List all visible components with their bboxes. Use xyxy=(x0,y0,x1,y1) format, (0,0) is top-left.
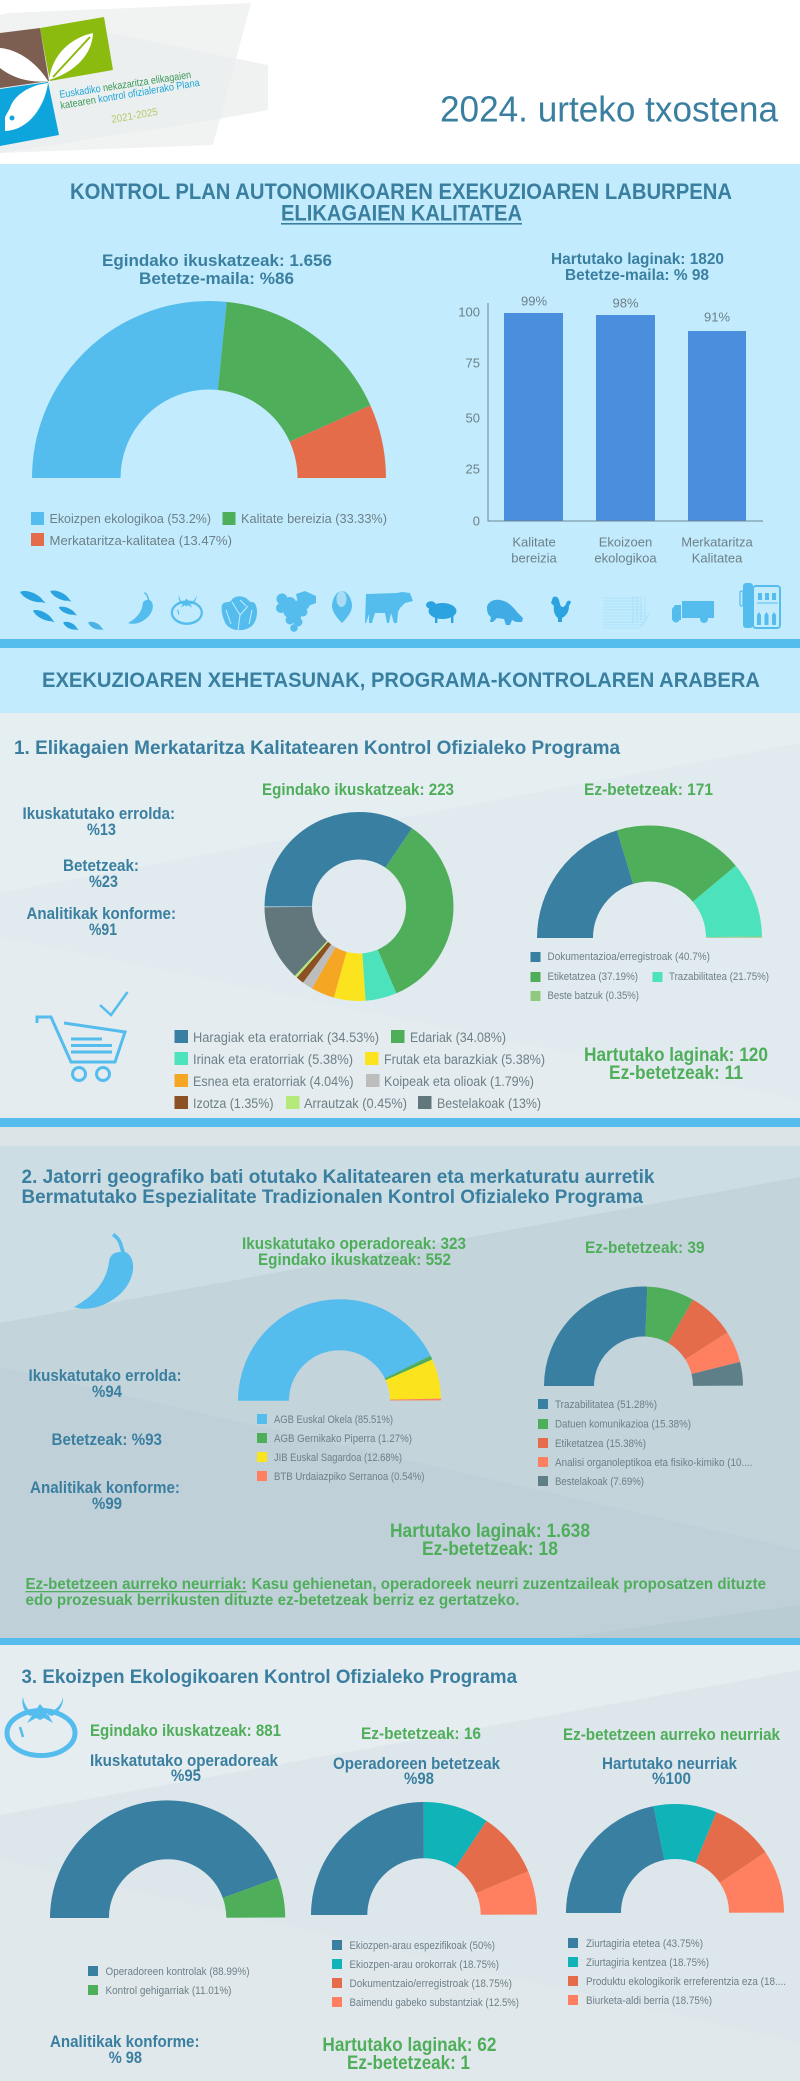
heading: programme 2: Bermatutako Espezialitate Tradizionalen Kontrol Ofizialeko Programa xyxy=(22,1187,643,1208)
legend: quality types: Kalitate bereizia (33.33%) xyxy=(241,511,387,526)
bar chart: samples compliance: 50 xyxy=(466,410,480,426)
legend: non-compliances: Trazabilitatea (21.75%) xyxy=(669,971,769,983)
heading: programme 2: 2. Jatorri geografiko bati otutako Kalitatearen eta merkaturatu aurretik xyxy=(22,1167,655,1188)
title: 2024. urteko txostena xyxy=(440,88,779,130)
legend: inspections by label: AGB Gernikako Piperra (1.27%) xyxy=(274,1433,412,1445)
logo: Euskadiko nekazaritza elikagaien xyxy=(59,69,192,101)
stats: column headings: %98 xyxy=(404,1770,434,1788)
panel: programme 2 xyxy=(0,1146,800,1645)
stat: non-compliances: Ez-betetzeak: 39 xyxy=(585,1239,704,1257)
samples stat xyxy=(551,251,724,284)
stat: conforming analyses: % 98 xyxy=(109,2049,142,2067)
icon: rooster xyxy=(551,597,571,622)
legend: non-compliances xyxy=(538,1399,752,1488)
legend: inspections by product: Esnea eta eratorriak (4.04%) xyxy=(193,1074,354,1089)
heading: programme 2 xyxy=(22,1167,655,1208)
heading: programme 1: 1. Elikagaien Merkataritza Kalitatearen Kontrol Ofizialeko Programa xyxy=(14,738,620,759)
bar chart: samples compliance: 0 xyxy=(473,514,480,528)
stat: samples: Hartutako laginak: 62 xyxy=(322,2035,496,2056)
legend: inspections by label: JIB Euskal Sagardoa (12.68%) xyxy=(274,1452,402,1464)
legend: inspections by product: Arrautzak (0.45%) xyxy=(304,1096,407,1111)
legend: inspections by product: Frutak eta barazkiak (5.38%) xyxy=(384,1052,545,1067)
stat: conforming analyses xyxy=(50,2033,200,2067)
stat: conforming analyses: Analitikak konforme: xyxy=(50,2033,200,2051)
bar chart: samples compliance: Kalitatea xyxy=(692,550,743,566)
icon: fish xyxy=(19,588,105,632)
stat: inspections: Egindako ikuskatzeak: 223 xyxy=(262,781,454,799)
samples stat: Hartutako laginak: 1820 xyxy=(551,251,724,268)
half donut chart: controls xyxy=(79,1830,256,1918)
bar chart: samples compliance: Kalitate xyxy=(512,534,556,550)
bar chart: samples compliance: bereizia xyxy=(511,550,558,566)
icon: cow xyxy=(365,592,413,623)
icon: documents xyxy=(603,596,650,628)
legend: quality types: Ekoizpen ekologikoa (53.2%) xyxy=(50,511,211,526)
stats: column headings: Ikuskatutako operadoreak xyxy=(90,1752,279,1770)
bar chart: samples compliance: ekologikoa xyxy=(594,550,657,566)
text block: measures: Kasu gehienetan, operadoreek neurri zuzentzaileak proposatzen dituzte xyxy=(252,1576,766,1593)
bar chart: samples compliance: 75 xyxy=(466,356,480,370)
half donut chart: non-compliances xyxy=(569,1312,718,1386)
legend: non-compliances: Trazabilitatea (51.28%) xyxy=(555,1399,657,1411)
stats: column headings: Ez-betetzeak: 16 xyxy=(361,1725,481,1743)
heading: summary: KONTROL PLAN AUTONOMIKOAREN EXEKUZIOAREN LABURPENA xyxy=(70,179,732,204)
stats: column headings: Ez-betetzeen aurreko neurriak xyxy=(563,1726,781,1744)
stats: census and compliance: Betetzeak: %93 xyxy=(52,1431,162,1449)
stat: samples: Ez-betetzeak: 18 xyxy=(422,1539,558,1560)
stat: samples: Ez-betetzeak: 11 xyxy=(609,1063,743,1084)
heading: execution details: EXEKUZIOAREN XEHETASUNAK, PROGRAMA-KONTROLAREN ARABERA xyxy=(42,669,760,692)
legend: inspections by product xyxy=(174,1030,545,1111)
legend: quality types xyxy=(31,511,387,548)
inspections stat xyxy=(102,251,332,288)
legend: non-compliances: Dokumentzaio/erregistroak (18.75%) xyxy=(350,1978,512,1990)
stats: column headings: Egindako ikuskatzeak: 881 xyxy=(90,1722,281,1740)
stats: census and compliance xyxy=(28,1367,182,1513)
bar chart: samples compliance: 99% xyxy=(521,294,547,308)
legend: inspections by product: Bestelakoak (13%) xyxy=(437,1096,541,1111)
text block: measures: Ez-betetzeen aurreko neurriak: xyxy=(26,1576,246,1593)
legend: non-compliances: Baimendu gabeko substantziak (12.5%) xyxy=(350,1997,519,2009)
stat: samples xyxy=(390,1521,590,1560)
stat: operators and inspections: Egindako ikuskatzeak: 552 xyxy=(258,1251,451,1269)
stats: census and compliance: %94 xyxy=(92,1383,123,1401)
legend: measures: Biurketa-aldi berria (18.75%) xyxy=(586,1995,712,2007)
stats: census and compliance xyxy=(22,805,176,939)
icon: sheep xyxy=(426,601,456,623)
icon: tomato xyxy=(7,1697,75,1756)
stats: column headings: Hartutako neurriak xyxy=(602,1755,738,1773)
stat: non-compliances: Ez-betetzeak: 171 xyxy=(584,781,713,799)
panel: summary xyxy=(0,164,800,713)
legend: non-compliances: Etiketatzea (37.19%) xyxy=(548,971,638,983)
icon: grapes xyxy=(276,591,316,632)
legend: inspections by product: Edariak (34.08%) xyxy=(410,1030,506,1045)
half donut chart: measures xyxy=(594,1832,756,1913)
inspections stat: Betetze-maila: %86 xyxy=(139,269,294,288)
legend: inspections by product: Irinak eta eratorriak (5.38%) xyxy=(193,1052,353,1067)
panel: header xyxy=(0,0,800,164)
stats: census and compliance: %13 xyxy=(87,821,116,839)
legend: inspections by label xyxy=(257,1414,424,1483)
logo: 2021-2025 xyxy=(110,106,159,126)
icon: chilli pepper xyxy=(74,1233,133,1309)
stats: census and compliance: Analitikak konforme: xyxy=(30,1479,180,1497)
stat: operators and inspections: Ikuskatutako operadoreak: 323 xyxy=(242,1235,466,1253)
legend: measures xyxy=(568,1938,786,2007)
stats: column headings: %95 xyxy=(171,1767,201,1785)
legend: measures: Ziurtagiria etetea (43.75%) xyxy=(586,1938,703,1950)
logo: katearen kontrol ofizialerako Plana xyxy=(60,77,201,112)
legend: inspections by label: AGB Euskal Okela (85.51%) xyxy=(274,1414,393,1426)
stats: census and compliance: Ikuskatutako errolda: xyxy=(22,805,175,823)
legend: inspections by product: Koipeak eta olioak (1.79%) xyxy=(384,1074,534,1089)
legend: non-compliances: Ekiozpen-arau orokorrak (18.75%) xyxy=(350,1959,499,1971)
bar chart: samples compliance: 91% xyxy=(704,310,730,324)
heading: summary: ELIKAGAIEN KALITATEA xyxy=(281,200,522,226)
half donut chart: non-compliances xyxy=(339,1830,509,1915)
icon: tomato xyxy=(172,595,202,624)
legend: non-compliances xyxy=(530,951,769,1002)
legend: inspections by product: Izotza (1.35%) xyxy=(193,1096,274,1111)
legend: quality types: Merkataritza-kalitatea (13.47%) xyxy=(50,533,232,548)
bar chart: samples compliance: Ekoizoen xyxy=(599,534,652,550)
legend: measures: Ziurtagiria kentzea (18.75%) xyxy=(586,1957,709,1969)
text block: measures: edo prozesuak berrikusten dituzte ez-betetzeak berriz ez gertatzeko. xyxy=(26,1592,520,1609)
stat: samples xyxy=(584,1045,768,1084)
legend: non-compliances: Etiketatzea (15.38%) xyxy=(555,1438,646,1450)
stat: samples: Hartutako laginak: 120 xyxy=(584,1045,768,1066)
bar chart: samples compliance: 98% xyxy=(612,296,639,310)
heading: summary xyxy=(70,179,732,226)
stat: operators and inspections xyxy=(242,1235,466,1269)
stat: samples: Hartutako laginak: 1.638 xyxy=(390,1521,590,1542)
stats: column headings xyxy=(90,1722,781,1788)
legend: non-compliances: Datuen komunikazioa (15.38%) xyxy=(555,1418,691,1430)
legend: non-compliances xyxy=(332,1940,519,2009)
icon: pig xyxy=(487,600,523,625)
icon: fridge xyxy=(740,583,780,628)
panel: programme 3 xyxy=(0,1645,800,2081)
icon: truck xyxy=(672,601,714,623)
half donut chart: non-compliances xyxy=(565,854,734,938)
stats: census and compliance: %23 xyxy=(89,873,118,891)
inspections stat: Egindako ikuskatzeak: 1.656 xyxy=(102,251,332,270)
stats: census and compliance: %91 xyxy=(89,921,117,939)
icon: pepper xyxy=(128,592,153,624)
stats: census and compliance: Analitikak konforme: xyxy=(26,905,176,923)
panel: programme 1 xyxy=(0,713,800,1146)
stats: census and compliance: Betetzeak: xyxy=(63,857,139,875)
legend: non-compliances: Beste batzuk (0.35%) xyxy=(548,990,639,1002)
samples stat: Betetze-maila: % 98 xyxy=(565,267,709,284)
stats: census and compliance: Ikuskatutako errolda: xyxy=(28,1367,182,1385)
logo xyxy=(0,3,268,153)
half donut chart: quality types xyxy=(76,345,342,478)
stats: column headings: Operadoreen betetzeak xyxy=(333,1755,501,1773)
legend: non-compliances: Analisi organoleptikoa eta fisiko-kimiko (10.... xyxy=(555,1457,752,1469)
legend: controls: Kontrol gehigarriak (11.01%) xyxy=(106,1985,232,1997)
stat: samples: Ez-betetzeak: 1 xyxy=(347,2053,470,2074)
donut chart: inspections by product xyxy=(288,836,430,977)
half donut chart: inspections by label xyxy=(264,1325,416,1401)
heading: programme 3: 3. Ekoizpen Ekologikoaren Kontrol Ofizialeko Programa xyxy=(22,1667,517,1688)
legend: non-compliances: Dokumentazioa/erregistroak (40.7%) xyxy=(548,951,710,963)
legend: non-compliances: Bestelakoak (7.69%) xyxy=(555,1476,644,1488)
bar chart: samples compliance: Merkataritza xyxy=(681,534,754,550)
stats: column headings: %100 xyxy=(652,1770,691,1788)
text block: measures xyxy=(26,1576,766,1609)
icon: lettuce xyxy=(222,596,257,630)
stat: samples xyxy=(322,2035,496,2074)
legend: inspections by label: BTB Urdaiazpiko Serranoa (0.54%) xyxy=(274,1471,424,1483)
stats: census and compliance: %99 xyxy=(92,1495,122,1513)
icon: corn xyxy=(332,591,352,623)
bar chart: samples compliance xyxy=(458,294,763,566)
legend: inspections by product: Haragiak eta eratorriak (34.53%) xyxy=(193,1030,379,1045)
legend: controls: Operadoreen kontrolak (88.99%) xyxy=(106,1966,250,1978)
legend: controls xyxy=(88,1966,250,1997)
icon row: food sectors xyxy=(19,583,780,632)
bar chart: samples compliance: 25 xyxy=(466,462,480,476)
legend: non-compliances: Ekiozpen-arau espezifikoak (50%) xyxy=(350,1940,495,1952)
bar chart: samples compliance: 100 xyxy=(458,304,480,320)
icon: shopping cart with check xyxy=(37,992,128,1080)
